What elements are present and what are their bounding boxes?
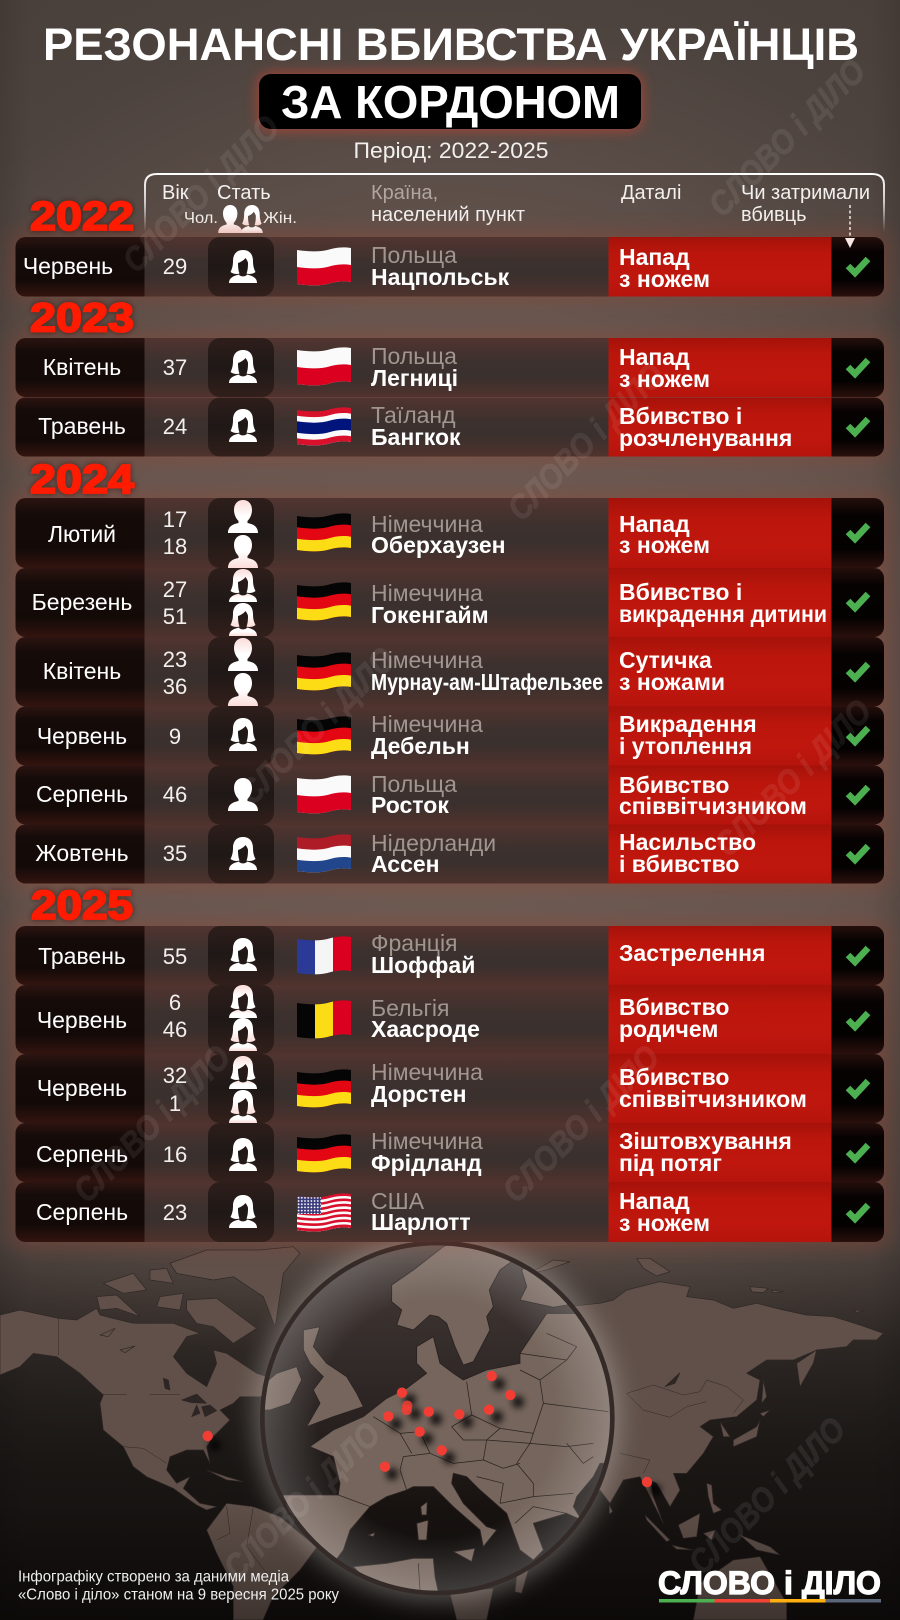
details: з ножами: [619, 669, 725, 695]
location markers: [202, 1371, 661, 1496]
place: Мурнау-ам-Штафельзее: [371, 669, 603, 695]
ages: [163, 577, 187, 629]
place: Франція: [371, 930, 458, 956]
flag: Belgium: [297, 1000, 351, 1040]
place: Німеччина: [371, 580, 483, 606]
details: Напад: [619, 511, 690, 537]
watermarks: СЛОВО і ДІЛО: [500, 356, 672, 528]
check: [848, 360, 868, 374]
place: Нідерланди: [371, 830, 496, 856]
month: Травень: [38, 413, 126, 439]
header: killers: вбивць: [741, 204, 807, 226]
header: details: Даталі: [621, 182, 681, 204]
place: Німеччина: [371, 647, 483, 673]
row: Польща, Росток: [16, 766, 884, 855]
place: [371, 511, 506, 558]
details: Напад: [619, 244, 690, 270]
age: 37: [163, 355, 187, 380]
place: [371, 343, 458, 391]
watermarks: СЛОВО і ДІЛО: [701, 52, 873, 224]
details: Вбивство: [619, 994, 729, 1020]
details: Застрелення: [619, 940, 765, 966]
check: [848, 664, 868, 678]
header: sex: Стать: [217, 182, 271, 204]
header: detained: Чи затримали: [741, 182, 870, 204]
icon: female: [229, 1138, 257, 1171]
flag: Germany: [297, 1134, 351, 1220]
age: 24: [163, 414, 187, 439]
globe ring: [262, 1243, 612, 1593]
ages: 32: [163, 1063, 187, 1088]
row: Польща, Нацпольськ: [16, 237, 884, 327]
flag: Thailand: [297, 407, 351, 498]
watermarks: СЛОВО і ДІЛО: [216, 1415, 388, 1587]
details: з ножем: [619, 532, 710, 558]
details: [619, 711, 757, 759]
details: розчленування: [619, 425, 792, 451]
check: [848, 846, 868, 860]
details: і вбивство: [619, 851, 739, 877]
watermarks: СЛОВО і ДІЛО: [681, 1410, 853, 1582]
flag: Germany: [297, 716, 351, 802]
header: country: Країна,: [371, 182, 438, 204]
place: [371, 1128, 483, 1176]
place: Легниці: [371, 365, 458, 391]
flag: Germany: [297, 513, 351, 599]
details: [619, 344, 710, 392]
row: Польща, Легниці: [16, 338, 884, 427]
details: Сутичка: [619, 647, 712, 673]
details: [619, 511, 710, 558]
logo: СЛОВО і ДІЛО: [658, 1565, 881, 1601]
month: Квітень: [43, 658, 121, 684]
row: Німеччина, Дорстен: [16, 1054, 884, 1155]
place: [371, 242, 510, 290]
place: Бельгія: [371, 995, 449, 1021]
month: Червень: [37, 1007, 127, 1033]
place: Дорстен: [371, 1081, 467, 1107]
details: Вбивство: [619, 772, 729, 798]
row: Німеччина, Мурнау-ам-Штафельзее: [16, 637, 884, 738]
icon: male: [228, 778, 258, 811]
header: male label: Чол.: [184, 210, 218, 227]
ages: 23: [163, 647, 187, 672]
icons: two females: [229, 1056, 257, 1123]
flag: Poland: [297, 775, 351, 855]
year 2025: 2025: [31, 882, 133, 928]
age: 16: [163, 1142, 187, 1167]
details: [619, 829, 756, 877]
place: Гокенгайм: [371, 602, 489, 628]
icon: female: [229, 718, 257, 751]
row glows: [12, 233, 888, 1246]
month: Червень: [23, 253, 113, 279]
icons: two males: [228, 638, 258, 706]
details: [619, 579, 827, 627]
details: Напад: [619, 1188, 690, 1214]
ages: 51: [163, 604, 187, 629]
place: [371, 1059, 483, 1107]
row: Бельгія, Хаасроде: [16, 985, 884, 1054]
flag: Poland: [297, 347, 351, 427]
ages: [163, 990, 187, 1042]
details: Зіштовхування: [619, 1128, 792, 1154]
place: [371, 402, 461, 450]
age: 9: [169, 724, 181, 749]
details: Вбивство і: [619, 579, 742, 605]
place: [371, 771, 457, 818]
age: 35: [163, 841, 187, 866]
place: Польща: [371, 771, 457, 797]
row: США, Шарлотт: [16, 1182, 884, 1287]
watermarks: СЛОВО і ДІЛО: [231, 640, 403, 812]
check: [848, 787, 868, 801]
details: співвітчизником: [619, 793, 807, 819]
row: Німеччина, Фрідланд: [16, 1123, 884, 1220]
icon: female: [229, 837, 257, 870]
month: Серпень: [36, 781, 128, 807]
month: Травень: [38, 943, 126, 969]
details: співвітчизником: [619, 1086, 807, 1112]
age: 55: [163, 944, 187, 969]
source note: [18, 1568, 339, 1604]
title badge: за кордоном: ЗА КОРДОНОМ: [281, 76, 620, 128]
ages: [163, 507, 187, 559]
place: Дебельн: [371, 733, 470, 759]
place: Фрідланд: [371, 1150, 482, 1176]
details: [619, 1064, 807, 1112]
place: Оберхаузен: [371, 532, 506, 558]
details: родичем: [619, 1016, 718, 1042]
source note: «Слово і діло» станом на 9 вересня 2025 року: [18, 1586, 339, 1604]
header: age: Вік: [162, 182, 189, 204]
place: [371, 1188, 471, 1235]
source note: Інфографіку створено за даними медіа: [18, 1568, 289, 1586]
month: Червень: [37, 723, 127, 749]
age: 46: [163, 782, 187, 807]
details: Вбивство і: [619, 403, 742, 429]
details: [619, 1188, 710, 1236]
year 2023: 2023: [30, 294, 134, 340]
check: [848, 728, 868, 742]
check: [848, 1145, 868, 1159]
month: Березень: [32, 589, 132, 615]
place: Польща: [371, 343, 457, 369]
check: [848, 525, 868, 539]
icon: female: [229, 1195, 257, 1228]
check: [848, 1205, 868, 1219]
flag: Germany: [297, 582, 351, 668]
ages: 46: [163, 1017, 187, 1042]
details: і утоплення: [619, 733, 752, 759]
row: Німеччина, Дебельн: [16, 706, 884, 802]
ages: 18: [163, 534, 187, 559]
place: Німеччина: [371, 511, 483, 537]
globe glass highlight: [262, 1243, 612, 1593]
details: [619, 244, 710, 292]
place: Німеччина: [371, 1059, 483, 1085]
place: Німеччина: [371, 711, 483, 737]
ages: 27: [163, 577, 187, 602]
place: Росток: [371, 792, 449, 818]
icons: two females: [229, 985, 257, 1051]
header: female label: Жін.: [263, 210, 297, 227]
month: Квітень: [43, 354, 121, 380]
ages: [163, 1063, 187, 1116]
flag: USA: [297, 1193, 351, 1287]
flag: Germany: [297, 652, 351, 738]
globe: Europe magnified: [257, 1237, 633, 1600]
icon: female: [229, 938, 257, 971]
check: [848, 1013, 868, 1027]
place: [371, 647, 603, 695]
watermarks: СЛОВО і ДІЛО: [66, 1038, 238, 1210]
details: [619, 403, 792, 451]
details: з ножем: [619, 366, 710, 392]
ages: 36: [163, 674, 187, 699]
row: Німеччина, Гокенгайм: [16, 568, 884, 668]
place: Бангкок: [371, 424, 461, 450]
month: Жовтень: [35, 840, 129, 866]
place: Шоффай: [371, 952, 475, 978]
row: Франція, Шоффай: [16, 926, 884, 985]
place: [371, 995, 480, 1042]
flag: Netherlands: [297, 834, 351, 920]
details: [619, 772, 807, 819]
check: [848, 948, 868, 962]
header: city: населений пункт: [371, 204, 525, 226]
place: Хаасроде: [371, 1016, 480, 1042]
icons: two females: [229, 569, 257, 636]
ages: [163, 647, 187, 699]
header: sex icons: [218, 205, 263, 233]
place: [371, 930, 475, 978]
icon: female: [229, 409, 257, 442]
place: Німеччина: [371, 1128, 483, 1154]
place: Шарлотт: [371, 1209, 471, 1235]
watermarks: СЛОВО і ДІЛО: [495, 1038, 667, 1210]
table header: [145, 174, 884, 233]
arrow to checks: [845, 205, 855, 248]
details: [619, 994, 729, 1042]
flag: Poland: [297, 247, 351, 327]
details: Викрадення: [619, 711, 757, 737]
details: з ножем: [619, 266, 710, 292]
year 2024: 2024: [30, 456, 134, 502]
month: Лютий: [48, 521, 116, 547]
row: Нідерланди, Ассен: [16, 824, 884, 920]
year 2022: 2022: [30, 193, 134, 239]
icon: female: [229, 250, 257, 283]
watermarks: СЛОВО і ДІЛО: [115, 108, 287, 280]
check: [848, 1081, 868, 1095]
watermarks: СЛОВО і ДІЛО: [707, 692, 879, 864]
check: [848, 419, 868, 433]
world map: [0, 1247, 900, 1620]
row: Таїланд, Бангкок: [16, 398, 884, 498]
details: Насильство: [619, 829, 756, 855]
place: [371, 830, 496, 877]
place: Нацпольськ: [371, 264, 510, 290]
flag: Germany: [297, 1069, 351, 1155]
details: [619, 647, 725, 695]
check: [848, 259, 868, 273]
details: Вбивство: [619, 1064, 729, 1090]
glow around globe: [254, 1235, 620, 1601]
place: Ассен: [371, 851, 440, 877]
period: Період: 2022-2025: [354, 138, 548, 163]
ages: 1: [169, 1091, 181, 1116]
flag: France: [297, 936, 351, 976]
row: Німеччина, Оберхаузен: [16, 498, 884, 599]
place: Таїланд: [371, 402, 456, 428]
details: [619, 1128, 792, 1176]
month: Червень: [37, 1075, 127, 1101]
title: РЕЗОНАНСНІ ВБИВСТВА УКРАЇНЦІВ: [43, 19, 859, 70]
ages: 6: [169, 990, 181, 1015]
icons: two males: [228, 500, 258, 568]
ages: 17: [163, 507, 187, 532]
details: Напад: [619, 344, 690, 370]
place: [371, 580, 489, 628]
details: викрадення дитини: [619, 601, 827, 627]
icon: female: [229, 350, 257, 383]
month: Серпень: [36, 1141, 128, 1167]
details: з ножем: [619, 1210, 710, 1236]
month: Серпень: [36, 1199, 128, 1225]
place: Польща: [371, 242, 457, 268]
place: США: [371, 1188, 425, 1214]
age: 29: [163, 254, 187, 279]
age: 23: [163, 1200, 187, 1225]
place: [371, 711, 483, 759]
check: [848, 594, 868, 608]
details: під потяг: [619, 1150, 722, 1176]
